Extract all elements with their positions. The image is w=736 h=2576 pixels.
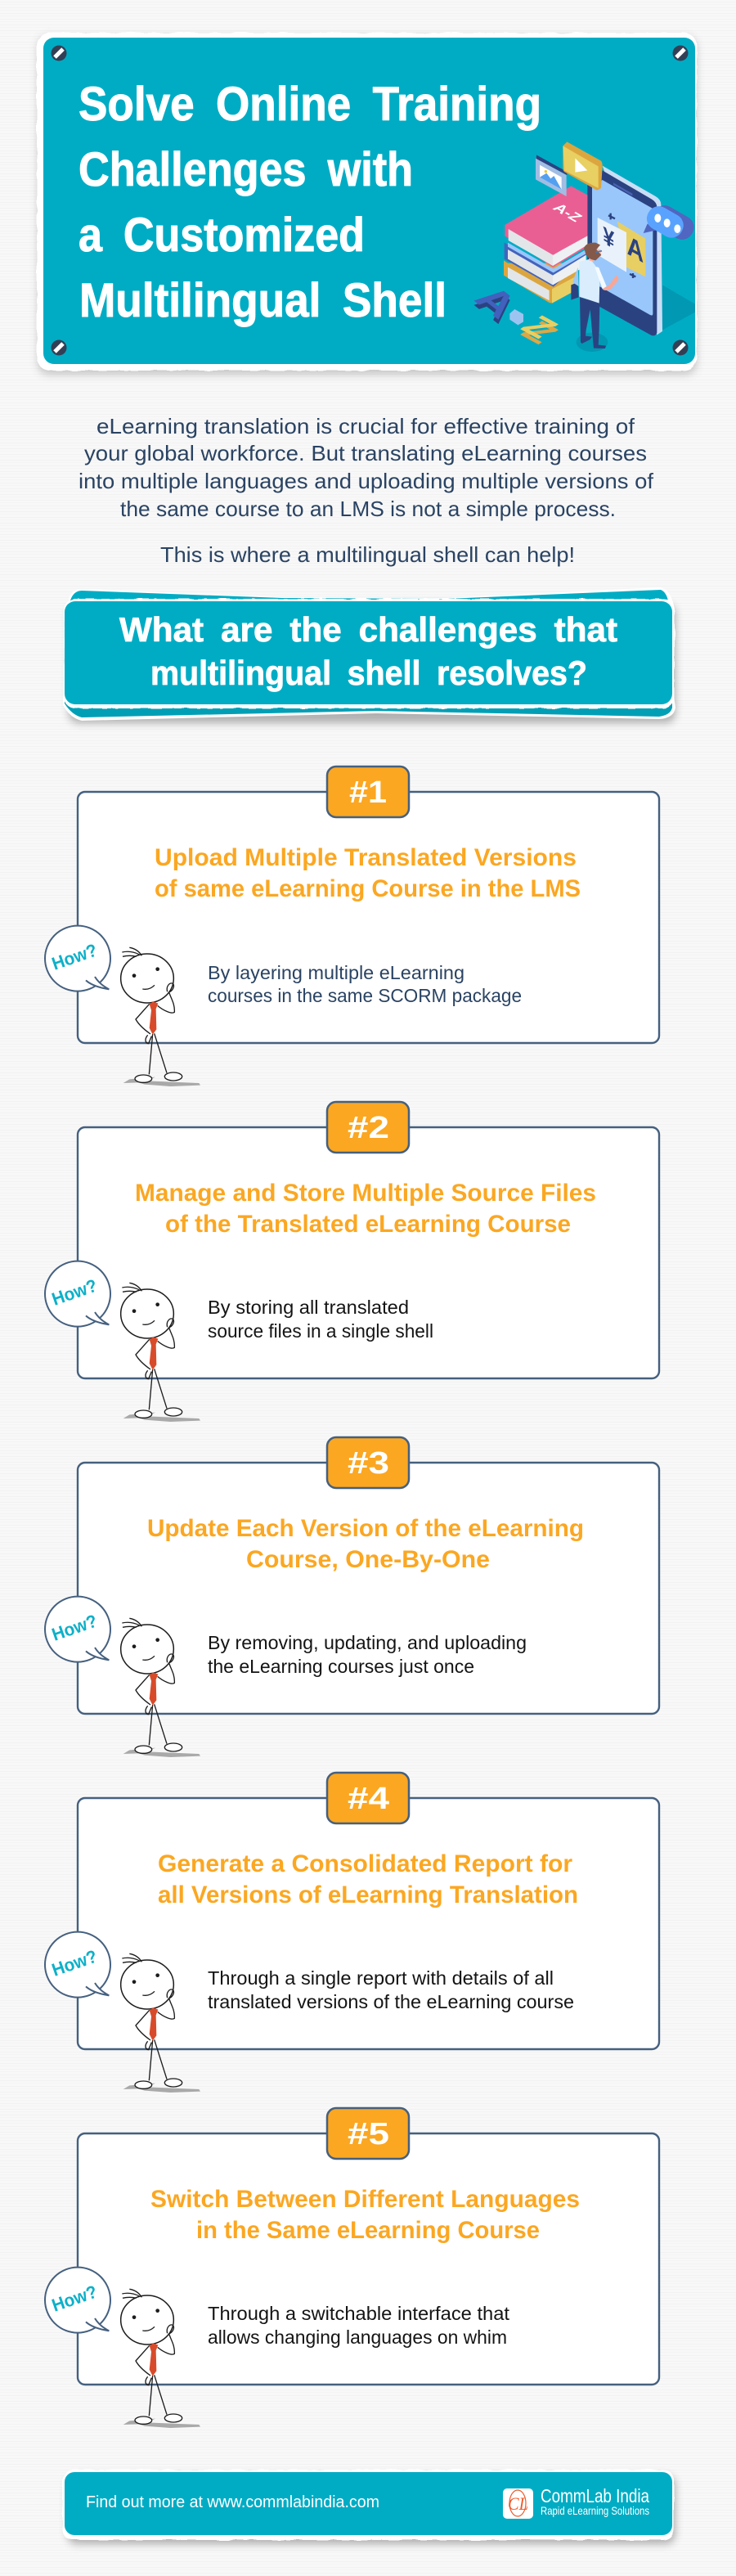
solution text: By removing, updating, and uploading	[208, 1632, 527, 1653]
solution text	[208, 2303, 510, 2348]
badge: number 5	[327, 2108, 409, 2159]
translation sheets: A	[627, 229, 644, 269]
solution text: translated versions of the eLearning course	[208, 1991, 574, 2012]
panel: challenge 4	[45, 1773, 659, 2093]
solution text	[208, 962, 522, 1006]
panel: challenge 1	[45, 767, 659, 1086]
challenge heading	[147, 1515, 584, 1573]
badge: number 5: #5	[348, 2117, 389, 2151]
intro paragraph: eLearning translation is crucial for effective training of	[96, 414, 635, 438]
challenge heading: Upload Multiple Translated Versions	[155, 844, 577, 871]
badge: number 3: #3	[348, 1446, 389, 1481]
solution text: allows changing languages on whim	[208, 2326, 507, 2348]
challenge heading: in the Same eLearning Course	[196, 2217, 540, 2244]
intro callout line: This is where a multilingual shell can help!	[160, 542, 575, 567]
translation sheets: ¥	[603, 222, 614, 255]
challenge heading: all Versions of eLearning Translation	[158, 1881, 578, 1908]
book title: A-Z: A-Z	[550, 200, 586, 224]
challenge heading: of the Translated eLearning Course	[165, 1211, 571, 1238]
man standing	[571, 243, 618, 348]
solution text: courses in the same SCORM package	[208, 985, 522, 1006]
solution text	[208, 1632, 527, 1677]
solution text: Through a single report with details of all	[208, 1967, 554, 1989]
speech bubble: How?	[45, 1597, 110, 1662]
challenge heading: Manage and Store Multiple Source Files	[135, 1180, 596, 1207]
challenge heading: Switch Between Different Languages	[150, 2186, 580, 2213]
logo: CommLab India: CommLab India	[541, 2485, 649, 2506]
solution text	[208, 1297, 433, 1342]
challenge heading: Update Each Version of the eLearning	[147, 1515, 584, 1542]
speech bubble: How?: How?	[49, 2282, 100, 2316]
title	[79, 78, 541, 327]
speech bubble: How?: How?	[49, 940, 100, 974]
translation sheets	[598, 214, 645, 278]
intro paragraph: the same course to an LMS is not a simple process.	[120, 497, 616, 521]
icon: chat bubble	[643, 201, 698, 244]
badge: number 1: #1	[349, 775, 387, 810]
icon: image window	[536, 155, 567, 196]
challenge heading	[158, 1850, 578, 1908]
letter A block: A	[466, 283, 526, 330]
footer link text: Find out more at www.commlabindia.com	[86, 2493, 379, 2511]
title: Challenges with	[79, 143, 413, 196]
challenge heading	[135, 1180, 596, 1238]
badge: number 3	[327, 1437, 409, 1488]
panel: challenge 2	[45, 1102, 659, 1422]
solution text: By storing all translated	[208, 1297, 409, 1318]
title: Solve Online Training	[79, 78, 541, 131]
screw: bottom right	[672, 340, 689, 355]
character: thinking stick figure	[121, 1953, 200, 2093]
section heading banner: What are the challenges that	[119, 610, 617, 649]
speech bubble: How?: How?	[49, 1275, 100, 1310]
screw: top right	[672, 46, 689, 61]
illustration: translation app with books and man	[466, 142, 698, 352]
intro paragraph: into multiple languages and uploading multiple versions of	[79, 469, 654, 493]
speech bubble: How?	[45, 1932, 110, 1998]
intro paragraph	[79, 414, 654, 521]
section heading banner: multilingual shell resolves?	[150, 654, 587, 692]
title: a Customized	[79, 209, 365, 262]
screw: bottom left	[51, 340, 67, 355]
character: thinking stick figure	[121, 1618, 200, 1757]
character: thinking stick figure	[121, 947, 200, 1086]
icon: video card	[563, 142, 603, 191]
panel: title header	[37, 33, 698, 375]
solution text: the eLearning courses just once	[208, 1656, 474, 1677]
badge: number 2	[327, 1102, 409, 1153]
character: thinking stick figure	[121, 1283, 200, 1422]
challenge heading: Generate a Consolidated Report for	[158, 1850, 572, 1877]
challenge heading: Course, One-By-One	[246, 1546, 490, 1573]
challenge heading	[155, 844, 581, 902]
speech bubble: How?	[45, 926, 110, 991]
intro paragraph: your global workforce. But translating eLearning courses	[84, 441, 647, 465]
speech bubble: How?	[45, 1261, 110, 1327]
speech bubble: How?: How?	[49, 1946, 100, 1980]
solution text	[208, 1967, 574, 2012]
badge: number 4: #4	[348, 1782, 389, 1816]
challenge heading	[150, 2186, 580, 2244]
logo: CommLab India: Rapid eLearning Solutions	[541, 2504, 649, 2517]
footer bar	[62, 2470, 675, 2544]
screw: top left	[51, 46, 67, 61]
challenge heading: of same eLearning Course in the LMS	[155, 875, 581, 902]
books stack	[504, 186, 587, 303]
small cube	[509, 309, 523, 325]
logo: CommLab India: CL	[508, 2493, 528, 2514]
panel: challenge 3	[45, 1437, 659, 1757]
badge: number 2: #2	[348, 1111, 389, 1145]
badge: number 4	[327, 1773, 409, 1823]
section heading banner	[63, 587, 675, 723]
title: Multilingual Shell	[79, 274, 447, 327]
solution text: source files in a single shell	[208, 1320, 433, 1342]
character: thinking stick figure	[121, 2289, 200, 2428]
solution text: Through a switchable interface that	[208, 2303, 510, 2324]
panel: challenge 5	[45, 2108, 659, 2428]
letter A block: A	[466, 278, 526, 326]
letter Z block: Z	[513, 315, 567, 349]
logo: CommLab India	[503, 2485, 649, 2519]
speech bubble: How?: How?	[49, 1611, 100, 1645]
solution text: By layering multiple eLearning	[208, 962, 464, 983]
speech bubble: How?	[45, 2268, 110, 2333]
letter Z block: Z	[513, 309, 567, 344]
badge: number 1	[327, 767, 409, 817]
